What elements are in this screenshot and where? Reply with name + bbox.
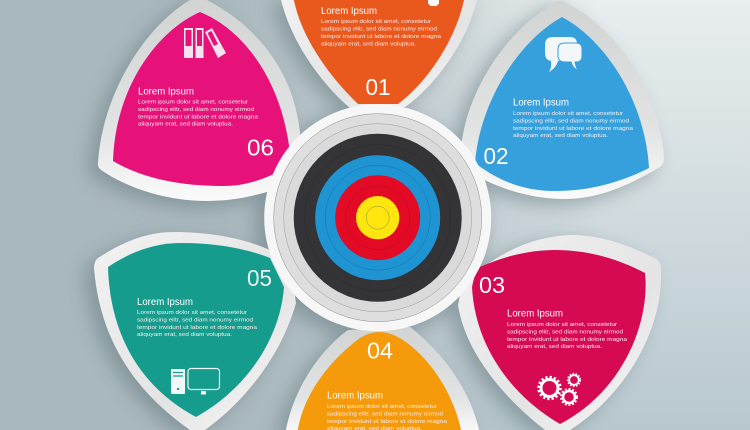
panel: 03 crimson petal [458,235,661,430]
text block 04: Lorem ipsum dolor sit amet, consetetur [327,404,437,410]
heading 06: Lorem Ipsum [138,86,194,98]
heading 02: Lorem Ipsum [513,98,569,108]
archery target [264,104,491,331]
panel: 04 amber petal [285,327,480,430]
text block 04 [327,404,448,430]
heading 05: Lorem Ipsum [137,297,193,308]
text block 06: Lorem ipsum dolor sit amet, consetetur [138,100,248,106]
petal shadows [85,1,655,430]
number 05: 05 [247,265,272,291]
heading 01: Lorem Ipsum [321,6,377,17]
icon: speech bubbles [545,37,582,72]
text block 03: Lorem ipsum dolor sit amet, consetetur [507,322,617,328]
icon: gears [538,374,580,405]
icon: computer [171,368,220,394]
text block 02: aliquyam erat, sed diam voluptua. [513,133,608,139]
text block 04: tempor invidunt ut labore et dolore magna [327,419,448,425]
text block 06: aliquyam erat, sed diam voluptua. [138,122,233,128]
text block 02: tempor invidunt ut labore et dolore magna [513,126,634,132]
text block 05: sadipscing elitr, sed diam nonumy eirmod [137,318,253,324]
text block 01: Lorem ipsum dolor sit amet, consetetur [321,19,431,25]
text block 01: tempor invidunt ut labore et dolore magna [321,34,442,40]
text block 02: sadipscing elitr, sed diam nonumy eirmod [513,118,629,124]
text block 01 [321,19,442,48]
text block 05: tempor invidunt ut labore et dolore magna [137,325,258,331]
text block 03: tempor invidunt ut labore et dolore magna [507,337,628,343]
text block 06: tempor invidunt ut labore et dolore magna [138,114,259,120]
panel: 02 blue petal [462,1,664,199]
panel: 06 magenta petal [98,0,301,201]
text block 05: Lorem ipsum dolor sit amet, consetetur [137,310,247,316]
heading 03: Lorem Ipsum [507,308,563,320]
text block 03 [507,322,628,350]
number 04: 04 [367,338,393,364]
text block 05: aliquyam erat, sed diam voluptua. [137,332,232,338]
icon: binders [184,28,226,58]
text block 04: sadipscing elitr, sed diam nonumy eirmod [327,412,443,418]
text block 02 [513,111,634,139]
text block 02: Lorem ipsum dolor sit amet, consetetur [513,111,623,117]
panel: 01 orange petal [280,0,478,108]
number 03: 03 [479,272,505,298]
text block 05 [137,310,258,338]
panel: 05 teal petal [94,232,296,430]
text block 06: sadipscing elitr, sed diam nonumy eirmod [138,107,254,113]
text block 01: aliquyam erat, sed diam voluptua. [321,42,416,48]
number 02: 02 [484,143,508,169]
text block 03: sadipscing elitr, sed diam nonumy eirmod [507,330,623,336]
text block 01: sadipscing elitr, sed diam nonumy eirmod [321,26,437,32]
number 06: 06 [247,134,274,160]
text block 03: aliquyam erat, sed diam voluptua. [507,344,602,350]
heading 04: Lorem Ipsum [327,390,383,402]
number 01: 01 [366,74,390,100]
text block 06 [138,100,259,128]
icon: light bulb [428,0,439,6]
